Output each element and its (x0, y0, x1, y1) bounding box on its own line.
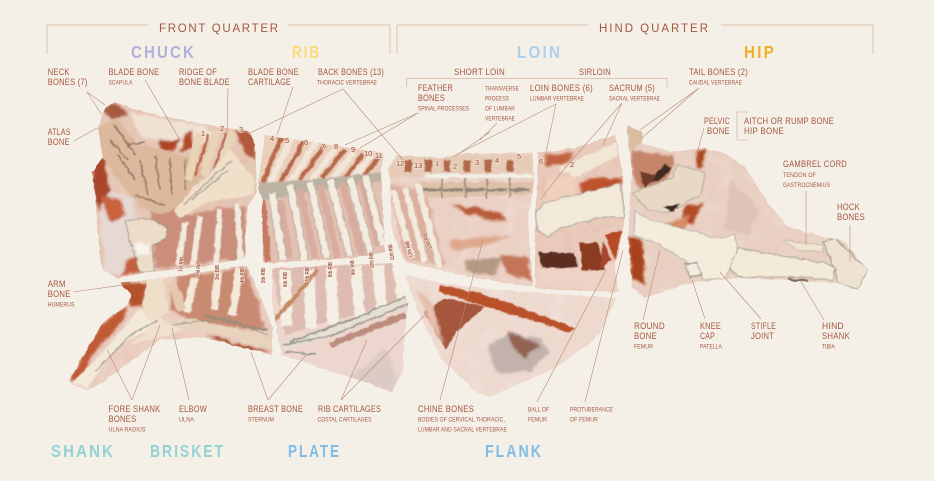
label: chine bones: CHINE BONES (418, 404, 474, 414)
label: atlas bone: ATLAS (48, 127, 71, 137)
label: transverse process: PROCESS (485, 96, 509, 102)
heading: loin: LOIN (517, 42, 562, 62)
label: sacrum: SACRUM (5) (609, 83, 655, 93)
vertebra numbers: 8 (334, 142, 338, 151)
heading: plate: PLATE (288, 441, 341, 461)
cut: rib (258, 135, 385, 264)
label: elbow: ULNA (179, 416, 195, 424)
label: neck bones: NECK (48, 67, 70, 77)
label: tail bones: TAIL BONES (2) (689, 67, 748, 77)
label: chine bones: BODIES OF CERVICAL THORACIC, (418, 416, 505, 424)
label: fore shank bones: BONES (108, 414, 136, 424)
vertebra numbers: 1 (201, 129, 205, 138)
heading: shank: SHANK (51, 441, 115, 461)
panel: hind quarter header (397, 23, 873, 54)
label: knee cap: CAP (700, 331, 715, 341)
heading: flank: FLANK (485, 441, 543, 461)
label: back bones: THORACIC VERTEBRAE (317, 80, 377, 86)
vertebra numbers: 7 (321, 142, 325, 151)
label: ridge of bone blade: BONE BLADE (179, 77, 230, 87)
rib labels: 13th RIB (422, 232, 434, 249)
rib labels: 11th RIB (388, 244, 396, 260)
rib labels: 8th RIB (328, 262, 334, 277)
label: loin bones: LOIN BONES (6) (530, 83, 593, 93)
label: gambrel cord (783, 159, 847, 189)
label: neck bones: BONES (7) (48, 77, 88, 87)
label: rib cartilages (318, 404, 381, 424)
label: hock bones: HOCK (837, 202, 860, 212)
label: arm bone: ARM (48, 279, 66, 289)
label: ball of femur (528, 406, 549, 424)
heading: hip: HIP (744, 42, 776, 62)
vertebra numbers: 1 (435, 159, 439, 168)
label: sacrum (609, 83, 660, 102)
label: aitch or rump bone (744, 116, 834, 136)
label: knee cap (700, 321, 723, 350)
cut: hip (620, 120, 875, 300)
rib labels: 6th RIB (283, 272, 289, 287)
label: tail bones (689, 67, 748, 86)
label: blade bone (108, 67, 160, 86)
label: gambrel cord: GAMBREL CORD (783, 159, 847, 169)
hind quarter heading: HIND QUARTER (599, 23, 708, 35)
label: transverse process: TRANSVERSE (485, 86, 519, 92)
label: round bone: BONE (634, 331, 657, 341)
label: blade bone cartilage: BLADE BONE (248, 67, 299, 77)
rib labels: 2nd RIB (195, 262, 203, 277)
label: feather bones: SPINAL PROCESSES (418, 106, 469, 112)
label: atlas bone (48, 127, 71, 147)
vertebra numbers: 6 (304, 138, 308, 147)
cut: sirloin (534, 135, 626, 292)
label: stifle joint: STIFLE (751, 321, 776, 331)
label: blade bone cartilage (248, 67, 299, 87)
label: aitch or rump bone: AITCH OR RUMP BONE (744, 116, 834, 126)
label: protuberance of femur: OF FEMUR (570, 416, 598, 424)
cut: chuck (92, 102, 258, 279)
rib labels: 1st RIB (178, 257, 186, 272)
leader lines (73, 78, 850, 402)
vertebra numbers: 3 (475, 158, 479, 167)
vertebra numbers: 5 (285, 136, 289, 145)
vertebra numbers (201, 124, 574, 171)
rib labels (178, 232, 434, 287)
label: hock bones: BONES (837, 212, 865, 222)
vertebra numbers: 9 (351, 145, 355, 154)
heading: rib: RIB (292, 42, 321, 62)
label: fore shank bones: ULNA RADIUS (108, 426, 146, 434)
vertebra numbers: 4 (270, 134, 274, 143)
label: back bones: BACK BONES (13) (318, 67, 384, 77)
vertebra numbers: 2 (570, 160, 574, 169)
label: pelvic bone: BONE (707, 126, 730, 136)
vertebra numbers: 5 (517, 152, 521, 161)
label: chine bones: LUMBAR AND SACRAL VERTEBRAE (418, 426, 507, 434)
label: breast bone (248, 404, 303, 424)
front quarter heading: FRONT QUARTER (159, 23, 278, 35)
label: rib cartilages: RIB CARTILAGES (318, 404, 381, 414)
cut: short loin (384, 150, 539, 290)
label: pelvic bone (704, 116, 730, 136)
label: elbow: ELBOW (179, 404, 207, 414)
rib labels: 3rd RIB (215, 265, 221, 280)
label: aitch or rump bone: HIP BONE (744, 126, 784, 136)
heading: chuck: CHUCK (131, 42, 196, 62)
vertebra numbers: 11 (375, 151, 383, 160)
label: blade bone cartilage: CARTILAGE (248, 77, 291, 87)
label: hind shank: TIBIA (822, 344, 836, 350)
label: transverse process: OF LUMBAR (485, 106, 515, 112)
cut: shank and brisket (69, 266, 274, 390)
label: blade bone: SCAPULA (108, 80, 133, 86)
label: breast bone: STERNUM (248, 416, 274, 424)
label: knee cap: PATELLA (700, 344, 723, 350)
heading: brisket: BRISKET (150, 441, 225, 461)
label: ball of femur: BALL OF (528, 406, 549, 414)
vertebra numbers: 2 (453, 162, 457, 171)
label: arm bone: BONE (48, 289, 71, 299)
rib labels: 4th RIB (240, 268, 246, 283)
label: knee cap: KNEE (700, 321, 721, 331)
label: transverse process: VERTEBRAE (485, 116, 515, 122)
label: ball of femur: FEMUR (528, 416, 547, 424)
label: arm bone (48, 279, 75, 308)
label: elbow (179, 404, 207, 424)
label: rib cartilages: COSTAL CARTILAGES (318, 416, 372, 424)
meat cuts (60, 95, 875, 400)
label: back bones (317, 67, 384, 86)
vertebra numbers: 2 (220, 124, 224, 133)
label: atlas bone: BONE (48, 137, 70, 147)
label: feather bones (418, 83, 469, 112)
label: chine bones (418, 404, 507, 434)
label: ridge of bone blade (179, 67, 230, 87)
label: fore shank bones: FORE SHANK (108, 404, 161, 414)
label: blade bone: BLADE BONE (108, 67, 160, 77)
panel: front quarter header (47, 23, 390, 54)
label: neck bones (48, 67, 88, 87)
vertebra numbers: 10 (364, 149, 372, 158)
label: tail bones: CAUDAL VERTEBRAE (689, 80, 742, 86)
label: feather bones: BONES (418, 93, 445, 103)
vertebra numbers: 3 (239, 125, 243, 134)
cut: plate (272, 263, 408, 392)
vertebra numbers: 6 (539, 157, 543, 166)
front quarter bracket (47, 25, 390, 54)
vertebra numbers: 4 (495, 156, 499, 165)
label: transverse process (485, 86, 519, 122)
label: protuberance of femur (570, 406, 613, 424)
label: round bone: FEMUR (634, 344, 653, 350)
label: loin bones: LUMBAR VERTEBRAE (530, 96, 584, 102)
hind quarter bracket (397, 25, 873, 54)
carcass illustration (60, 95, 875, 400)
label: hind shank: SHANK (822, 331, 850, 341)
label: hock bones (837, 202, 865, 222)
label: hind shank (822, 321, 850, 350)
label: round bone (634, 321, 665, 350)
label: sirloin: SIRLOIN (579, 67, 611, 77)
label: stifle joint (751, 321, 776, 341)
label: pelvic bone: PELVIC (704, 116, 730, 126)
rib labels: 5th RIB (261, 268, 267, 283)
label: hind shank: HIND (822, 321, 844, 331)
rib labels: 7th RIB (305, 267, 311, 282)
label: loin bones (530, 83, 593, 102)
label: round bone: ROUND (634, 321, 665, 331)
rib labels: 10th RIB (369, 252, 376, 268)
label: ridge of bone blade: RIDGE OF (179, 67, 217, 77)
rib labels: 12th RIB (405, 240, 415, 258)
label: short loin: SHORT LOIN (454, 67, 505, 77)
vertebra numbers: 12 (396, 159, 404, 168)
label: sacrum: SACRAL VERTEBRAE (609, 96, 660, 102)
label: arm bone: HUMERUS (48, 302, 75, 308)
label: protuberance of femur: PROTUBERANCE (570, 406, 613, 414)
label: breast bone: BREAST BONE (248, 404, 303, 414)
label: stifle joint: JOINT (751, 331, 774, 341)
vertebra numbers: 13 (414, 161, 422, 170)
label: feather bones: FEATHER (418, 83, 453, 93)
label: fore shank bones (108, 404, 161, 434)
cut: flank (405, 275, 616, 396)
label: gambrel cord: TENDON OF (783, 172, 816, 179)
label: gambrel cord: GASTROCNEMIUS (783, 182, 830, 189)
rib labels: 9th RIB (350, 260, 357, 275)
